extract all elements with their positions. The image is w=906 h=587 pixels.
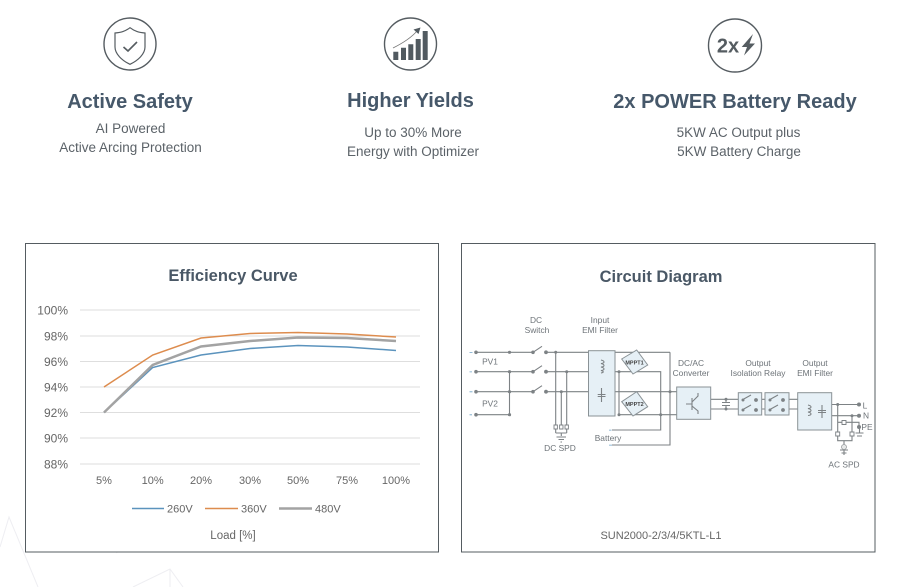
y axis labels: 90%: [44, 432, 68, 446]
labels: Battery: [595, 433, 622, 443]
labels: DC SPD: [544, 443, 576, 453]
y axis labels: 94%: [44, 380, 68, 394]
icon: 2x lightning: [708, 19, 762, 72]
labels: AC SPD: [828, 460, 860, 470]
legend: 260V: [167, 504, 193, 516]
axis title: Load [%]: [210, 530, 256, 542]
y axis labels: [37, 304, 68, 472]
text: battery ready description: 5KW Battery Charge: [677, 144, 801, 159]
icon: 2x lightning: 2x: [717, 36, 739, 58]
text: battery ready description: 5KW AC Output plus: [677, 125, 801, 140]
feature: higher yields: [347, 18, 480, 159]
series: 360V: [104, 332, 396, 387]
legend: 360V: [241, 504, 267, 516]
heading: circuit diagram: Circuit Diagram: [600, 268, 722, 286]
heading: efficiency curve: Efficiency Curve: [168, 267, 298, 285]
feature: active safety: [59, 18, 202, 155]
wires: [476, 352, 670, 415]
MPPT 1: MPPT1: [625, 360, 644, 366]
x axis labels: 30%: [239, 475, 261, 487]
x axis labels: 50%: [287, 475, 309, 487]
labels: PV1: [482, 356, 498, 366]
x axis labels: 100%: [382, 475, 410, 487]
ground symbols: [556, 427, 864, 453]
MPPT 2: MPPT2: [625, 402, 644, 408]
labels: Converter: [673, 368, 710, 378]
series: 480V: [104, 338, 396, 412]
text: active safety description: Active Arcing Protection: [59, 140, 202, 155]
legend: [132, 504, 341, 516]
MPPT 1: [622, 350, 648, 374]
icon: shield: [104, 18, 156, 70]
feature: battery ready: [613, 19, 858, 159]
icon: rising bars: [384, 18, 436, 70]
y axis labels: 100%: [37, 304, 68, 318]
labels: Switch: [525, 325, 550, 335]
labels: Input: [591, 315, 610, 325]
labels: L: [863, 400, 868, 410]
labels: PV2: [482, 398, 498, 408]
wire dots: [474, 350, 861, 429]
decorative background lines: [0, 517, 183, 587]
legend: 480V: [315, 504, 341, 516]
labels: N: [863, 410, 869, 420]
labels: EMI Filter: [582, 325, 618, 335]
series: 260V: [104, 346, 396, 412]
labels: PE: [861, 422, 873, 432]
heading: higher yields: Higher Yields: [347, 90, 474, 112]
y axis labels: 96%: [44, 355, 68, 369]
output isolation relay: [738, 393, 789, 415]
polarity marks: [470, 352, 612, 446]
y axis labels: 88%: [44, 458, 68, 472]
text: higher yields description: Energy with Optimizer: [347, 144, 480, 159]
input EMI filter: [588, 351, 615, 416]
panel: circuit diagram: [462, 244, 875, 552]
x axis labels: 75%: [336, 475, 358, 487]
MPPT 2: [622, 392, 648, 416]
heading: battery ready: 2x POWER Battery Ready: [613, 91, 858, 113]
x axis labels: 20%: [190, 475, 212, 487]
panel: efficiency curve: [26, 244, 438, 552]
labels: EMI Filter: [797, 368, 833, 378]
labels: Isolation Relay: [731, 368, 786, 378]
output EMI filter: [798, 393, 832, 430]
x axis labels: 10%: [142, 475, 164, 487]
DC/AC converter: [677, 387, 711, 419]
SPD elements: [554, 420, 854, 436]
labels: DC/AC: [678, 358, 704, 368]
model caption: SUN2000-2/3/4/5KTL-L1: [600, 530, 722, 542]
x axis labels: 5%: [96, 475, 112, 487]
labels: [482, 315, 873, 470]
text: higher yields description: Up to 30% More: [364, 125, 462, 140]
line chart: [37, 304, 420, 487]
x axis labels: [96, 475, 410, 487]
heading: active safety: Active Safety: [67, 91, 194, 113]
circuit schematic: [470, 315, 873, 470]
labels: DC: [530, 315, 542, 325]
labels: Output: [802, 358, 828, 368]
y axis labels: 92%: [44, 406, 68, 420]
y axis labels: 98%: [44, 330, 68, 344]
labels: Output: [745, 358, 771, 368]
text: active safety description: AI Powered: [96, 121, 165, 136]
